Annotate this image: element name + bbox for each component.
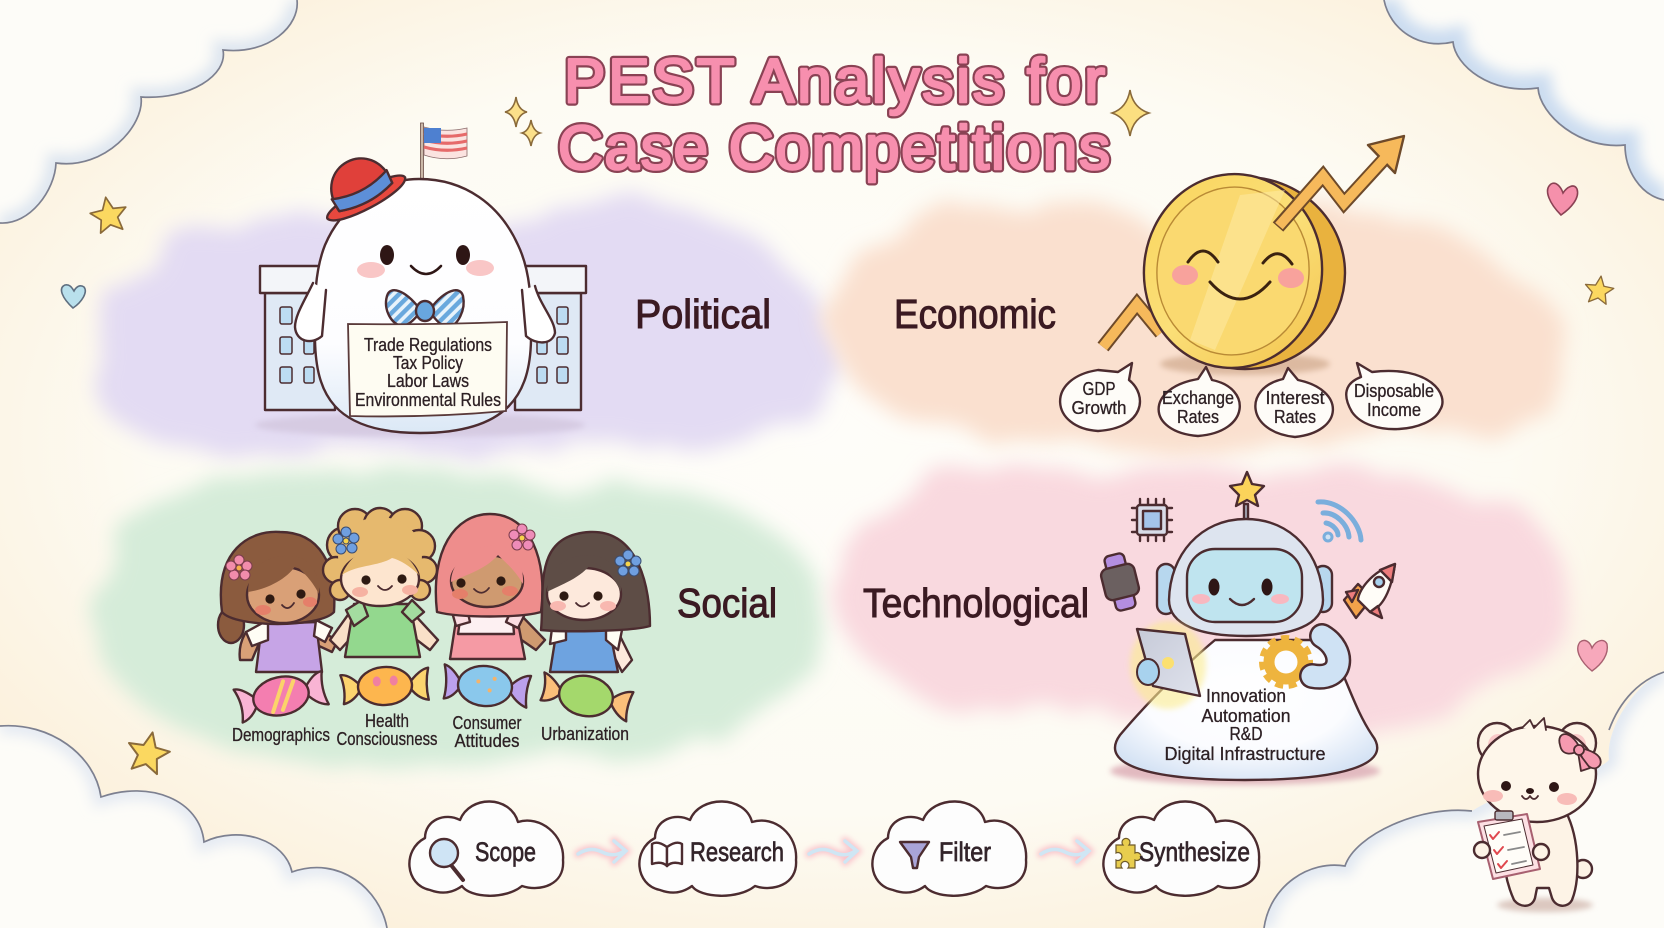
panel: political: [255, 123, 771, 437]
label: Scope: Scope: [475, 837, 536, 867]
callout: Disposable Income: [1346, 363, 1442, 429]
icon: coin shadow: [1160, 353, 1330, 375]
character: robot helmet and face: [1169, 519, 1323, 636]
icon: pink heart upper right: [1548, 183, 1578, 215]
icon: star right: [1583, 274, 1615, 305]
callout: GDP Growth: [1060, 363, 1140, 431]
callout: Exchange Rates: Exchange: [1162, 388, 1234, 408]
character: ghost body: [295, 179, 555, 433]
icon: candy blue: [441, 662, 532, 710]
title: Case Competitions: [558, 114, 1110, 183]
icon: chip: [1132, 499, 1172, 541]
icon: smiling coin: [1134, 165, 1345, 377]
arrow: lower segment fill: [1103, 304, 1161, 347]
cloud: bottom left corner: [0, 726, 387, 928]
cloud: bottom right corner: [1264, 672, 1664, 928]
icon: sparkles left of title: [505, 97, 540, 146]
label: Urbanization: Urbanization: [541, 724, 629, 744]
process: cloud synthesize: [1103, 801, 1259, 896]
wash: economic orange: [825, 200, 1565, 455]
character: face: [357, 245, 494, 278]
text: technological factors: Automation: [1202, 706, 1290, 726]
icon: candy green: [538, 668, 635, 724]
arrow: rising upper segment: [1278, 136, 1404, 227]
process: cloud research: [639, 801, 796, 896]
label: Research: Research: [690, 837, 784, 867]
callout: Interest Rates: Interest: [1266, 388, 1324, 408]
callout: Disposable Income: Disposable: [1354, 381, 1434, 401]
icon: bow tie: [386, 290, 464, 328]
arrow: scope to research: [578, 841, 626, 862]
process: cloud filter: [872, 801, 1026, 896]
character: child four: [541, 532, 650, 672]
character: teddy bear with clipboard: [1474, 718, 1601, 912]
callout: Exchange Rates: [1159, 367, 1240, 436]
callout: Interest Rates: Rates: [1274, 407, 1316, 427]
icon: blue heart: [62, 285, 85, 308]
icon: magnifier: [430, 839, 463, 880]
icon: candy pink: [233, 668, 329, 724]
icon: smartwatch: [1097, 551, 1143, 613]
panel: economic: [894, 136, 1442, 437]
character: robot body: [1115, 640, 1377, 780]
icon: robot arm: [1312, 636, 1338, 677]
callout: Exchange Rates: Rates: [1177, 407, 1219, 427]
process: cloud scope: [409, 801, 563, 896]
icon: lower arrow segment: [1103, 304, 1161, 347]
heading: political: Political: [635, 291, 771, 337]
label: Health Consciousness: Health: [365, 711, 409, 731]
panel: social: [218, 508, 777, 751]
wash: social green: [90, 470, 825, 770]
text: technological factors: Digital Infrastructure: [1164, 744, 1326, 764]
arrow: research to filter: [809, 841, 857, 862]
icon: wifi: [1318, 502, 1361, 541]
title: [558, 47, 1110, 183]
icon: blue flower four: [615, 550, 641, 576]
wash: political purple: [95, 200, 835, 455]
icon: open book: [652, 843, 682, 866]
label: Filter: Filter: [939, 837, 991, 867]
icon: star antenna: [1230, 472, 1264, 520]
icon: rocket: [1344, 564, 1395, 618]
icon: funnel: [900, 842, 929, 868]
sign: political factors: Labor Laws: [387, 371, 469, 391]
icon: capitol building: [255, 266, 586, 437]
callout: Interest Rates: [1255, 368, 1333, 437]
arrow: filter to synthesize: [1041, 841, 1089, 862]
wash: technological pink: [835, 465, 1562, 735]
cloud: top left corner: [0, 0, 297, 223]
sign: political factors: Tax Policy: [393, 353, 463, 373]
icon: red hat: [308, 141, 410, 228]
icon: yellow gear: [1262, 638, 1310, 686]
character: child three: [436, 514, 545, 659]
callout: GDP Growth: Growth: [1072, 398, 1126, 418]
sign: political factors: [348, 322, 507, 416]
icon: star left: [88, 194, 129, 234]
label: Synthesize: Synthesize: [1139, 837, 1250, 867]
icon: pink flower one: [226, 555, 252, 580]
character: robot ear muffs: [1157, 564, 1332, 614]
character: child one: [218, 532, 338, 672]
cloud: top right corner: [1384, 0, 1664, 200]
title: PEST Analysis for: [564, 47, 1105, 116]
label: Consumer Attitudes: Attitudes: [454, 731, 520, 751]
heading: technological: Technological: [863, 580, 1089, 626]
icon: robot shadow: [1110, 757, 1380, 785]
icon: puzzle piece: [1116, 838, 1141, 868]
panel: technological: [863, 472, 1395, 785]
label: Consumer Attitudes: [452, 713, 522, 751]
icon: blue flower two: [333, 527, 359, 554]
sign: political factors: Trade Regulations: [364, 335, 492, 355]
icon: sparkle right of title: [1112, 90, 1149, 136]
icon: glowing tablet: [1130, 621, 1206, 709]
heading: social: Social: [677, 580, 777, 626]
label: Health Consciousness: [336, 711, 438, 749]
title: Case Competitions: [558, 114, 1110, 183]
callout: GDP Growth: GDP: [1082, 379, 1116, 399]
text: technological factors: R&D: [1230, 724, 1262, 744]
icon: american flag: [420, 123, 467, 183]
text: technological factors: [1164, 686, 1326, 764]
sign: political factors: Environmental Rules: [355, 390, 501, 410]
label: Health Consciousness: Consciousness: [336, 729, 438, 749]
icon: star bottom left: [124, 728, 173, 776]
icon: pink flower three: [509, 524, 535, 550]
text: technological factors: Innovation: [1206, 686, 1286, 706]
icon: pink heart lower right: [1578, 640, 1607, 671]
character: child two: [323, 508, 438, 657]
icon: candy yellow: [340, 665, 430, 707]
title: PEST Analysis for: [564, 47, 1105, 116]
label: Demographics: Demographics: [232, 725, 330, 745]
heading: economic: Economic: [894, 291, 1056, 337]
callout: Disposable Income: Income: [1367, 400, 1421, 420]
label: Consumer Attitudes: Consumer: [452, 713, 522, 733]
